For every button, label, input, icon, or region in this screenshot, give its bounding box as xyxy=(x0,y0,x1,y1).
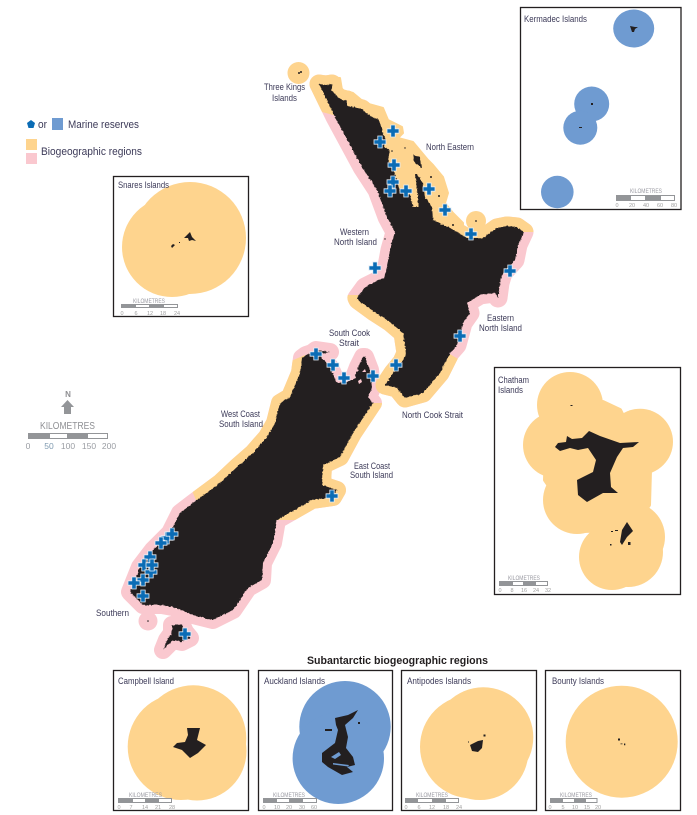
label: South Cook Strait xyxy=(329,328,370,348)
buffer area xyxy=(523,372,673,590)
region: North Island pink band xyxy=(319,84,524,398)
frame xyxy=(402,670,536,810)
scale bar: 20 xyxy=(286,805,292,811)
buffer area xyxy=(566,686,678,798)
marine reserve markers xyxy=(128,125,516,640)
scale bar: 8 xyxy=(510,588,514,594)
scale bar: 24 xyxy=(533,588,539,594)
label: West Coast South Island: West Coast xyxy=(221,409,260,419)
scale bar: 0 xyxy=(548,805,552,811)
scale bar: 12 xyxy=(147,311,153,317)
label: Eastern North Island: Eastern xyxy=(487,313,514,323)
land: Chatham Island xyxy=(555,431,639,502)
label: Western North Island: North Island xyxy=(334,237,377,247)
land xyxy=(322,710,358,775)
panel: Campbell Island xyxy=(114,670,248,811)
frame xyxy=(114,176,248,316)
scale bar: KILOMETRES xyxy=(508,576,540,582)
heading: Subantarctic biogeographic regions: Subantarctic biogeographic regions xyxy=(307,655,488,667)
main scale bar: KILOMETRES xyxy=(40,421,95,432)
title: Snares Islands xyxy=(118,180,169,190)
land xyxy=(618,738,625,745)
land: New Zealand xyxy=(130,84,524,650)
main scale bar: 100 xyxy=(61,441,75,451)
frame xyxy=(258,670,392,810)
scale bar: KILOMETRES xyxy=(273,793,305,799)
label: East Coast South Island xyxy=(350,461,393,480)
panel: Bounty Islands xyxy=(546,670,680,811)
frame xyxy=(546,670,680,810)
inlet xyxy=(331,752,349,766)
scale bar xyxy=(548,793,601,811)
scale bar: 18 xyxy=(443,805,449,811)
scale bar: 20 xyxy=(595,805,601,811)
swatch: marine reserve area xyxy=(52,118,63,130)
title: Islands xyxy=(498,385,523,395)
title: Campbell Island xyxy=(118,676,174,686)
scale bar: 40 xyxy=(643,203,649,209)
scale bar: 7 xyxy=(129,805,133,811)
label: East Coast South Island: South Island xyxy=(350,470,393,480)
panel: Kermadec Islands xyxy=(520,8,681,210)
scale bar: 18 xyxy=(160,311,166,317)
label: Western North Island xyxy=(334,227,377,247)
label: North Cook Strait: North Cook Strait xyxy=(402,410,463,420)
main scale bar: 200 xyxy=(102,441,116,451)
scale bar: 10 xyxy=(274,805,280,811)
panel: Snares Islands xyxy=(114,176,248,317)
title: Chatham xyxy=(498,375,529,385)
scale bar: 15 xyxy=(584,805,590,811)
label: North Eastern: North Eastern xyxy=(426,142,474,152)
scale bar: 12 xyxy=(429,805,435,811)
buffer area xyxy=(122,182,246,297)
land xyxy=(171,232,196,248)
scale bar: 6 xyxy=(417,805,421,811)
legend xyxy=(26,118,142,164)
scale bar: 0 xyxy=(498,588,502,594)
scale bar: 21 xyxy=(155,805,161,811)
label: Eastern North Island xyxy=(479,313,522,333)
label: West Coast South Island: South Island xyxy=(219,419,263,429)
label: Southern: Southern xyxy=(96,608,129,618)
scale bar: 20 xyxy=(629,203,635,209)
scale bar: 6 xyxy=(134,311,138,317)
label: East Coast South Island: East Coast xyxy=(354,461,390,471)
legend text: biogeographic regions: Biogeographic regions xyxy=(41,146,142,158)
scale bar: KILOMETRES xyxy=(560,793,592,799)
region: North Eastern offshore area xyxy=(315,77,477,238)
scale bar: 80 xyxy=(671,203,677,209)
legend text: or: or xyxy=(38,119,47,131)
frame xyxy=(494,368,680,594)
region: East Coast South Island band xyxy=(277,403,382,520)
region: West Coast South Island band xyxy=(192,355,306,500)
panel: Chatham Islands xyxy=(494,368,680,594)
title: Kermadec Islands xyxy=(524,14,587,24)
marine reserve areas xyxy=(541,10,654,208)
label: South Cook Strait: South Cook xyxy=(329,328,370,338)
land xyxy=(468,734,486,752)
scale bar: 24 xyxy=(174,311,180,317)
label: Three Kings Islands: Three Kings xyxy=(264,82,305,92)
frame xyxy=(114,670,248,810)
scale bar: KILOMETRES xyxy=(416,793,448,799)
scale bar: 14 xyxy=(142,805,148,811)
region: North Eastern band xyxy=(310,74,534,238)
scale bar: 60 xyxy=(311,805,317,811)
scale bar: 0 xyxy=(120,311,124,317)
label: Western North Island: Western xyxy=(340,227,369,237)
scale bar: 32 xyxy=(545,588,551,594)
scale bar xyxy=(404,793,462,811)
swatch: pink region xyxy=(26,153,37,164)
scale bar: 24 xyxy=(456,805,462,811)
title: Antipodes Islands xyxy=(407,676,471,686)
scale bar: 30 xyxy=(299,805,305,811)
scale bar xyxy=(498,576,551,594)
region: Three Kings Islands circle xyxy=(288,62,310,84)
main scale bar: 0 xyxy=(26,441,31,451)
label: Three Kings Islands: Islands xyxy=(272,93,297,103)
panel: Auckland Islands xyxy=(258,670,392,811)
map: New Zealand biogeographic regions xyxy=(96,62,524,650)
icon: marine reserve marker xyxy=(27,120,35,128)
main scale bar: 50 xyxy=(44,441,54,451)
scale bar xyxy=(117,793,175,811)
scale bar: 60 xyxy=(657,203,663,209)
region: Mayor Island circle xyxy=(466,211,486,231)
label: South Cook Strait: Strait xyxy=(339,338,359,348)
marine reserve area xyxy=(293,681,391,804)
scale bar: 10 xyxy=(572,805,578,811)
scale bar xyxy=(615,189,677,209)
title xyxy=(498,375,529,395)
scale bar: 0 xyxy=(262,805,266,811)
land xyxy=(173,728,206,758)
title: Auckland Islands xyxy=(264,676,325,686)
north arrow: N xyxy=(65,390,71,399)
scale bar: KILOMETRES xyxy=(133,299,165,305)
label: Eastern North Island: North Island xyxy=(479,323,522,333)
scale bar xyxy=(120,299,180,317)
scale bar: 16 xyxy=(521,588,527,594)
scale bar xyxy=(262,793,317,811)
scale bar: 0 xyxy=(615,203,619,209)
region: Cook Strait north band xyxy=(347,295,458,408)
buffer area xyxy=(128,685,246,800)
land: small islands and sound detail xyxy=(147,71,477,622)
scale bar: 28 xyxy=(169,805,175,811)
main scale bar xyxy=(26,421,116,451)
scale bar: 5 xyxy=(561,805,565,811)
region: Solander Island circle xyxy=(138,612,158,630)
scale bar: 0 xyxy=(117,805,121,811)
swatch: orange region xyxy=(26,139,37,150)
panel: Antipodes Islands xyxy=(402,670,536,811)
land xyxy=(579,26,638,128)
title: Bounty Islands xyxy=(552,676,604,686)
scale bar: 0 xyxy=(404,805,408,811)
frame xyxy=(520,8,681,210)
buffer area xyxy=(420,687,533,800)
label: Three Kings Islands xyxy=(264,82,305,103)
scale bar: KILOMETRES xyxy=(630,189,662,195)
land detail xyxy=(325,722,360,731)
scale bar: KILOMETRES xyxy=(129,793,162,799)
land: Pitt Island and islets xyxy=(570,405,633,546)
label: West Coast South Island xyxy=(219,409,263,429)
north arrow xyxy=(61,390,74,414)
main scale bar: 150 xyxy=(82,441,96,451)
region: South Island pink band xyxy=(130,350,373,650)
legend text: marine reserves: Marine reserves xyxy=(68,119,139,131)
